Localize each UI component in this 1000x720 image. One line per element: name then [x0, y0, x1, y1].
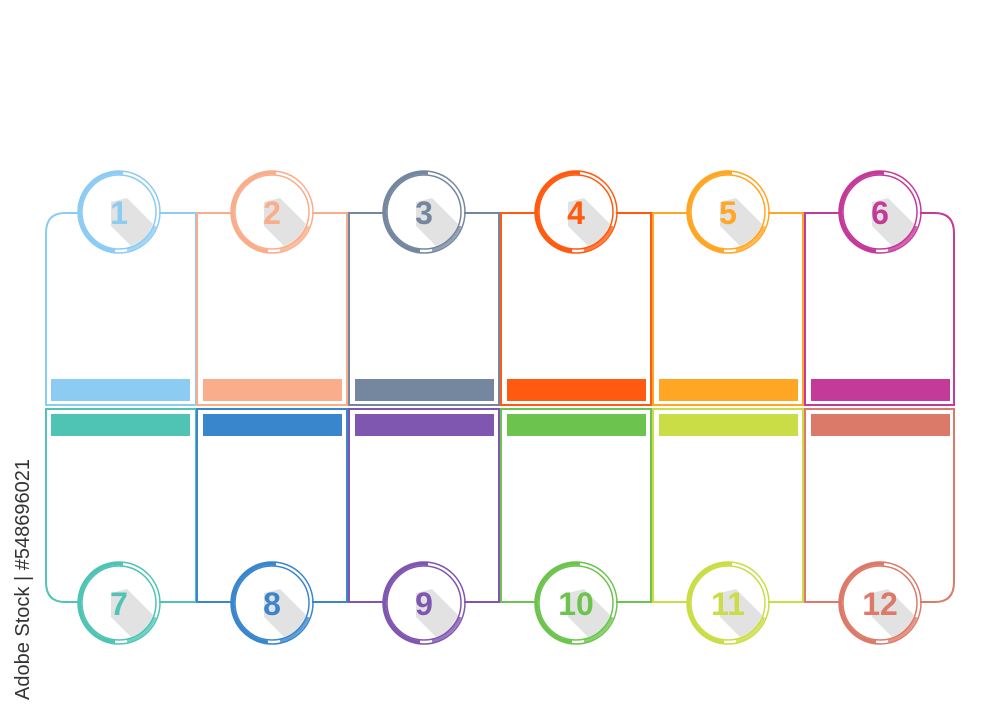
badge 11	[686, 561, 770, 645]
badge 9: 9	[415, 586, 433, 622]
badge 1: 1	[110, 195, 128, 231]
badge 7: 7	[110, 586, 128, 622]
bottom color bars	[51, 414, 950, 436]
badge 8	[230, 561, 314, 645]
badge 5	[686, 170, 770, 254]
vertical credit text: Adobe Stock | #548696021	[12, 459, 34, 700]
badge 2	[230, 170, 314, 254]
badge 2: 2	[263, 195, 281, 231]
badge 5: 5	[719, 195, 737, 231]
top color bars	[51, 379, 950, 401]
badge 1	[77, 170, 161, 254]
badge 7	[77, 561, 161, 645]
badge 10	[534, 561, 618, 645]
badge 3: 3	[415, 195, 433, 231]
badge 6: 6	[871, 195, 889, 231]
badge 11: 11	[711, 586, 745, 622]
panel: top row boxes	[46, 213, 954, 405]
badge 10: 10	[558, 586, 594, 622]
badge 8: 8	[263, 586, 281, 622]
badge 9	[382, 561, 466, 645]
panel: bottom row boxes	[46, 409, 954, 602]
badge 3	[382, 170, 466, 254]
badge 4	[534, 170, 618, 254]
badge 12	[838, 561, 922, 645]
badge 12: 12	[862, 586, 898, 622]
badge 4: 4	[567, 195, 585, 231]
badge 6	[838, 170, 922, 254]
